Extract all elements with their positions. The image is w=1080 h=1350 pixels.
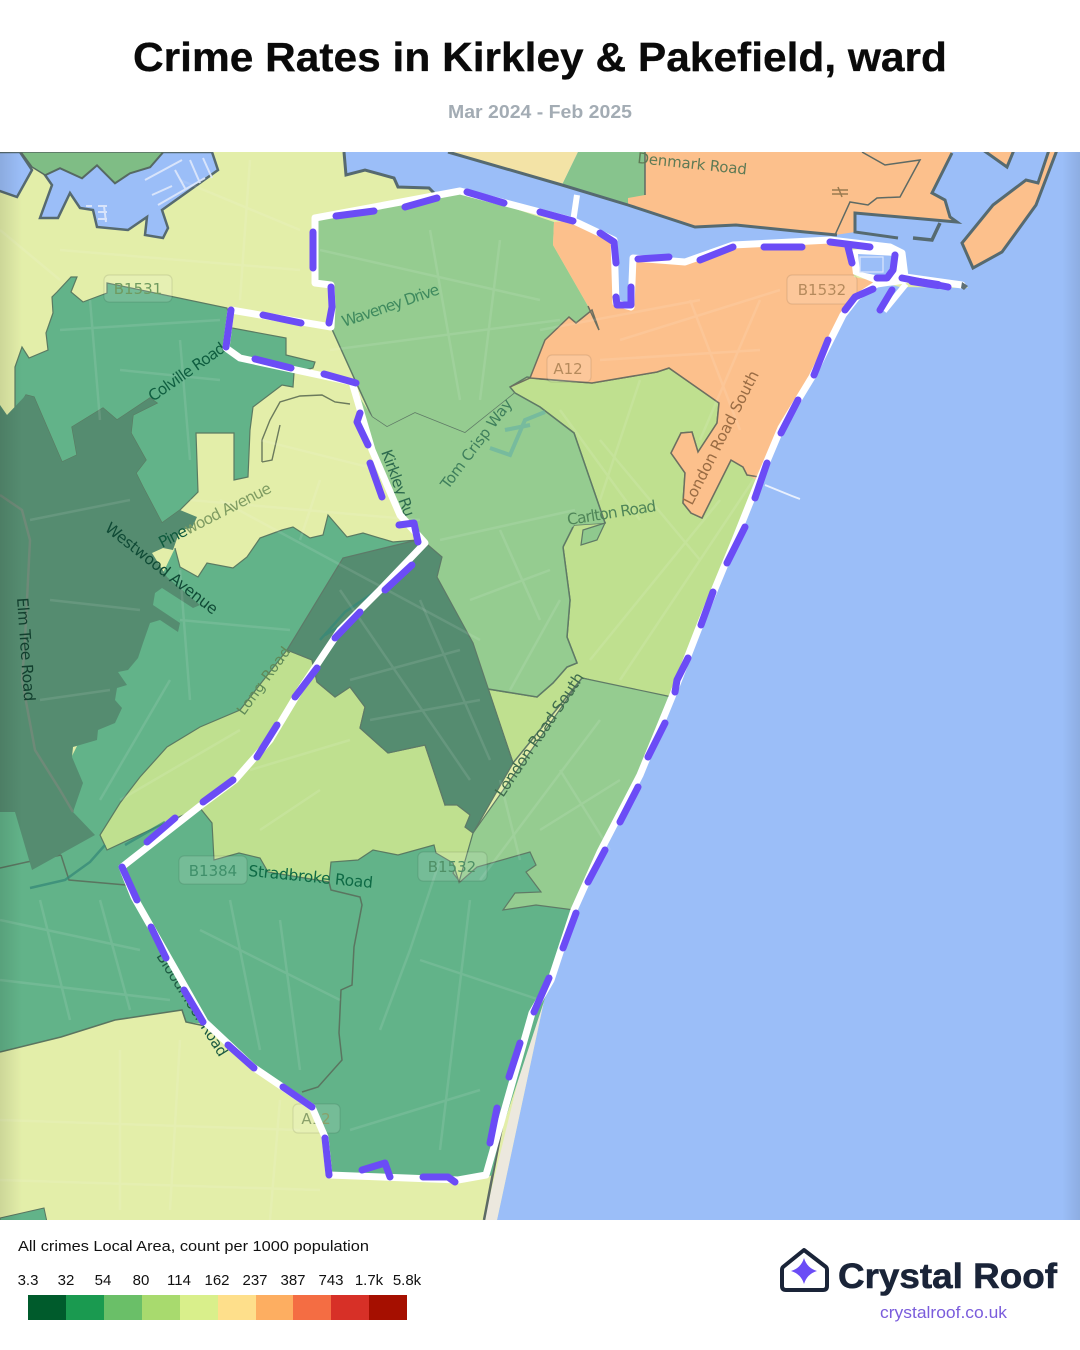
small green patch at Carlton Road	[581, 523, 605, 545]
orange island	[962, 150, 1057, 268]
road label Kirkley Rd: Kirkley Ru	[377, 447, 418, 519]
road label Tom Crisp Way: Tom Crisp Way	[436, 395, 516, 493]
orange area notch outline	[645, 152, 920, 235]
north yellow area	[448, 152, 578, 185]
road label Pinewood Avenue: Pinewood Avenue	[156, 479, 274, 552]
road label London Road South north: London Road South	[680, 368, 763, 508]
Pinewood north boundary	[175, 515, 417, 577]
legend tick labels: 743	[318, 1272, 344, 1289]
sea and river	[344, 152, 1080, 1220]
region: Tom Crisp Way green	[352, 385, 605, 697]
legend	[18, 1238, 422, 1320]
map edge vignette right	[1062, 152, 1080, 1220]
small white pier	[765, 485, 800, 499]
bottom-left green corner	[0, 1208, 47, 1222]
website url: crystalroof.co.uk	[880, 1304, 1008, 1322]
north shoreline and harbour walls	[344, 152, 957, 240]
logo wordmark: Crystal Roof	[838, 1257, 1057, 1296]
south ward internal boundary	[302, 882, 362, 1092]
road badge A12 south	[293, 1104, 340, 1133]
region: London Road South green	[453, 678, 672, 910]
faint road network	[0, 160, 780, 1220]
road label Long Road: Long Road	[234, 644, 294, 718]
green strip between ward and shore	[489, 996, 546, 1176]
map edge vignette left	[0, 152, 22, 1220]
Waveney boundary line	[331, 327, 515, 433]
legend tick labels: 162	[204, 1272, 230, 1289]
legend tick labels: 1.7k	[355, 1272, 384, 1289]
pier end nub	[961, 282, 968, 290]
thicker dash on east pier	[912, 281, 938, 285]
road badge B1532 north: B1532	[798, 281, 846, 299]
legend tick labels	[18, 1272, 422, 1289]
road badge A12	[547, 355, 591, 382]
legend tick labels: 3.3	[18, 1272, 38, 1289]
region: Carlton Road light green	[488, 368, 759, 763]
icon: house outline	[782, 1250, 827, 1290]
legend colour ramp	[28, 1295, 407, 1320]
white pier spurs	[573, 195, 906, 311]
curved park outline, Pinewood	[262, 395, 350, 462]
north orange area	[628, 152, 957, 235]
West green south boundary	[0, 855, 205, 1052]
choropleth map	[0, 149, 1080, 1222]
legend title: All crimes Local Area, count per 1000 population	[18, 1238, 369, 1255]
region: Colville Road green 3	[15, 277, 315, 523]
road badge B1384: B1384	[189, 862, 237, 880]
top-left green area	[21, 152, 163, 183]
road badge A12 south: A12	[301, 1110, 331, 1128]
pond at Tom Crisp Way	[490, 412, 545, 455]
orange wedge, top right	[983, 150, 1014, 167]
road label Colville Road: Colville Road	[145, 339, 229, 405]
region: Waveney Drive green	[315, 190, 599, 433]
map base land: pale yellow-green band	[0, 152, 968, 1220]
water streaks teal	[30, 591, 382, 890]
beach and shore strip	[485, 1002, 544, 1220]
road label Waveney Drive: Waveney Drive	[339, 281, 442, 331]
road label Denmark Road: Denmark Road	[637, 149, 748, 178]
road label Bloodmoor Road: Bloodmoor Road	[153, 949, 231, 1060]
icon: purple sparkle	[791, 1258, 817, 1284]
road badge A12: A12	[553, 360, 583, 378]
subtitle: date range: Mar 2024 - Feb 2025	[448, 101, 632, 122]
road label Stradbroke Road: Stradbroke Road	[248, 862, 374, 892]
road badge B1532 south	[418, 852, 487, 881]
legend tick labels: 32	[58, 1272, 74, 1289]
road label London Road South south: London Road South	[491, 669, 588, 800]
region: West green 3	[0, 515, 417, 1052]
title: Crime Rates in Kirkley & Pakefield, ward	[133, 34, 947, 80]
ward boundary: purple dashes	[122, 192, 948, 1182]
north green area	[562, 152, 648, 205]
region: Elm Tree Road dark green	[0, 395, 200, 870]
harbour basin	[850, 247, 905, 284]
logo: Crystal Roof	[782, 1250, 1057, 1322]
ward boundary: white casing	[122, 191, 962, 1180]
legend tick labels: 387	[280, 1272, 306, 1289]
inland water, far top left	[0, 152, 32, 197]
legend tick labels: 5.8k	[393, 1272, 422, 1289]
road badge B1532 south: B1532	[428, 858, 476, 876]
legend tick labels: 54	[95, 1272, 111, 1289]
road badge B1531	[104, 275, 172, 302]
railway station symbol	[832, 187, 848, 197]
orange boundary line	[510, 306, 759, 518]
road label Elm Tree Road: Elm Tree Road	[13, 597, 38, 702]
road badge B1532 north	[787, 275, 857, 304]
road badge B1384	[179, 856, 247, 884]
region: orange ward core	[530, 221, 880, 518]
Tom Crisp Way region boundary	[488, 393, 605, 697]
region: South ward green 3	[122, 808, 574, 1178]
legend tick labels: 237	[242, 1272, 268, 1289]
inland marina water, top left	[40, 152, 218, 238]
shore dark line	[482, 1126, 504, 1220]
Elm Tree Road corridor line	[0, 495, 73, 812]
legend tick labels: 80	[133, 1272, 149, 1289]
region: central dark green	[287, 540, 513, 833]
road label Westwood Avenue: Westwood Avenue	[102, 519, 221, 618]
road label Carlton Road: Carlton Road	[566, 497, 658, 529]
legend tick labels: 114	[167, 1272, 191, 1289]
marina jetties	[86, 158, 212, 222]
road badge B1531: B1531	[114, 280, 162, 298]
region: park light green (central)	[100, 650, 513, 882]
